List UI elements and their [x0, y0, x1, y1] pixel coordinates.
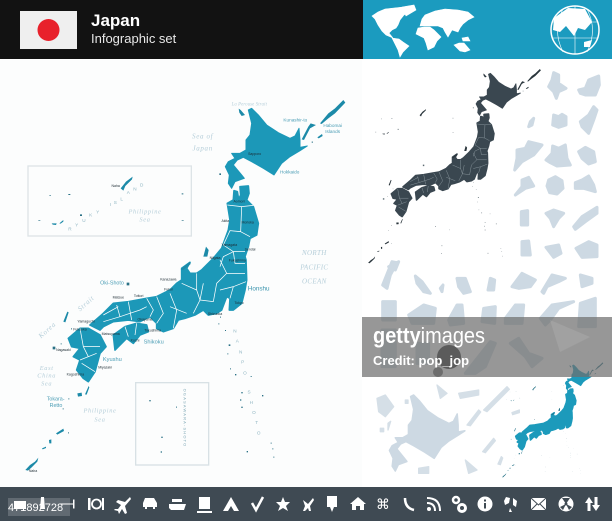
label: Ryukyu Islands: U [82, 218, 86, 223]
region labels: Oki-Shoto [100, 281, 124, 287]
map: island dots [38, 142, 313, 458]
icon: check [252, 497, 263, 510]
prefecture shapes: lower grid [382, 262, 595, 373]
label: Nanpo-Shoto: A [236, 339, 240, 344]
icon: gears [453, 497, 466, 512]
sea labels: OCEAN [302, 278, 327, 286]
label: Nanpo-Shoto: S [247, 389, 251, 394]
city labels: Matsue [113, 296, 124, 300]
icon: up and down arrows [585, 497, 600, 511]
sea labels: Philippine [82, 408, 117, 415]
city labels: Kanazawa [160, 278, 177, 282]
city labels: Yamagata [222, 243, 237, 247]
map: Hokkaido [225, 108, 307, 188]
enlarged Hokkaido islands [377, 385, 519, 473]
city labels: Fukui [164, 288, 173, 292]
city labels: Niigata [210, 256, 220, 260]
label: Ogasawara-Shoto: OGASAWARA-SHOTO [183, 389, 188, 447]
globe [551, 6, 599, 54]
city labels: Morioka [241, 221, 254, 225]
icon: Japan flag [20, 11, 77, 49]
label: Nanpo-Shoto [233, 328, 261, 435]
sea labels: Philippine [127, 208, 162, 215]
header: black title bar [0, 0, 363, 59]
label: Ryukyu Islands: A [127, 190, 131, 195]
inset box: Ogasawara-Shoto [136, 383, 209, 465]
sea labels: PACIFIC [299, 263, 328, 271]
icon: home [350, 497, 366, 510]
sea labels: Sea [139, 216, 151, 223]
label: Ryukyu Islands: S [114, 200, 117, 205]
icon: star [276, 497, 290, 511]
icon: mail [531, 498, 546, 510]
map: enlarged Hokkaido [389, 395, 465, 471]
icon: command: ⌘ [376, 497, 390, 513]
icon: bag [14, 501, 26, 509]
label: Ryukyu Islands: D [140, 183, 144, 188]
header: teal map bar [363, 0, 612, 59]
bottom icon bar [0, 487, 612, 521]
icon: restaurant [88, 498, 104, 510]
watermark: credit: Credit: pop_jop [373, 353, 469, 368]
icon: globe [504, 497, 517, 512]
region labels: Retto [50, 403, 62, 409]
city labels: Kagoshima [67, 373, 84, 377]
city labels: Sapporo [248, 152, 261, 156]
city labels: Yamaguchi [77, 319, 95, 323]
background: map panel [0, 60, 362, 487]
region labels: Kunashir-to [283, 117, 308, 122]
city labels: Nagasaki [56, 348, 71, 352]
sea labels: Japan [192, 145, 213, 153]
label: Nanpo-Shoto: N [233, 328, 237, 333]
icon: route [60, 500, 74, 508]
city labels: Tottori [134, 294, 144, 298]
city labels: Naha [111, 184, 120, 188]
label: Nanpo-Shoto: O [243, 370, 247, 375]
label: Ryukyu Islands: Y [75, 223, 78, 228]
region labels: Shikoku [144, 340, 164, 346]
region labels: Habomai [323, 123, 342, 128]
label: Ryukyu Islands: R [68, 227, 72, 232]
icon: pin [40, 497, 45, 509]
label: Nanpo-Shoto: O [252, 410, 256, 415]
panel: main map of Japan [25, 100, 345, 473]
city labels: Akita [221, 219, 229, 223]
prefecture shapes: upper grid [389, 73, 599, 270]
label: Nanpo-Shoto: H [250, 400, 253, 405]
region labels [47, 117, 342, 409]
city labels: Sendai [245, 247, 256, 251]
inset box: Ryukyu Islands [28, 166, 191, 236]
region labels: Hokkaido [280, 170, 300, 175]
icon: speech balloon [327, 496, 337, 512]
label: Ryukyu Islands [68, 183, 144, 232]
sea labels: Strait [76, 294, 96, 313]
sea labels: NORTH [301, 249, 327, 257]
icon: radiation [558, 496, 574, 512]
panel: lower prefecture shapes and maps [377, 262, 603, 477]
city labels [29, 152, 261, 473]
sea labels: China [37, 372, 56, 379]
label: Ryukyu Islands: L [120, 196, 123, 201]
watermark: gettyimages: gettyimages [373, 323, 485, 348]
label: Nanpo-Shoto: O [257, 430, 261, 435]
subtitle: Infographic set [91, 31, 177, 46]
icon: car [143, 498, 157, 509]
city labels: Fukushima [229, 258, 246, 262]
icon: rss [427, 498, 440, 511]
prefecture borders [80, 205, 253, 372]
label: Ryukyu Islands: K [89, 213, 93, 218]
city labels: Tokyo [234, 301, 244, 305]
sea labels: Sea of [192, 133, 214, 141]
city labels: Aomori [233, 200, 245, 204]
watermark band [362, 317, 612, 377]
city labels: Tokushima [144, 329, 161, 333]
icon row [14, 496, 600, 514]
image id number [8, 498, 70, 516]
world map [372, 5, 474, 57]
region labels: Islands [325, 129, 341, 134]
sea labels [36, 102, 328, 423]
region labels: Honshu [248, 285, 270, 292]
region labels: Kyushu [103, 357, 122, 363]
label: Ryukyu Islands: I [110, 202, 111, 207]
icon: phone [405, 498, 414, 510]
map: small islands [25, 100, 345, 471]
map: Honshu, Shikoku and Kyushu [68, 186, 258, 382]
city labels: Naha [29, 469, 37, 473]
panel: dark map of Japan [368, 69, 599, 270]
icon: info [478, 496, 492, 512]
image id number: 471892728 [8, 502, 63, 514]
label: Ryukyu Islands: Y [96, 209, 99, 214]
label: Nanpo-Shoto: P [241, 359, 244, 364]
icon: train [197, 497, 212, 513]
map: teal locator map of Japan [502, 362, 603, 477]
city labels: Shizuoka [208, 312, 222, 316]
city labels: Okayama [138, 317, 153, 321]
icon: tent [223, 497, 239, 511]
city labels: Fukuoka [73, 327, 87, 331]
icon: airplane [114, 497, 131, 514]
sea labels: Korea [36, 320, 58, 341]
sea labels: East [39, 365, 54, 372]
dark map: main islands [368, 69, 541, 263]
title: Japan [91, 11, 140, 30]
sea labels: Sea [41, 380, 52, 387]
sea labels: Sea [94, 416, 106, 423]
label: Nanpo-Shoto: N [239, 349, 242, 354]
city labels: Miyazaki [98, 366, 112, 370]
label: Nanpo-Shoto: T [255, 420, 258, 425]
icon: ship [169, 499, 186, 510]
city labels: Kochi [131, 339, 140, 343]
icon: deer [303, 498, 314, 511]
label: Ryukyu Islands: N [133, 187, 137, 192]
city labels: Matsuyama [102, 332, 120, 336]
region labels: Tokara- [47, 396, 65, 402]
sea labels: La Perouse Strait [231, 102, 268, 107]
